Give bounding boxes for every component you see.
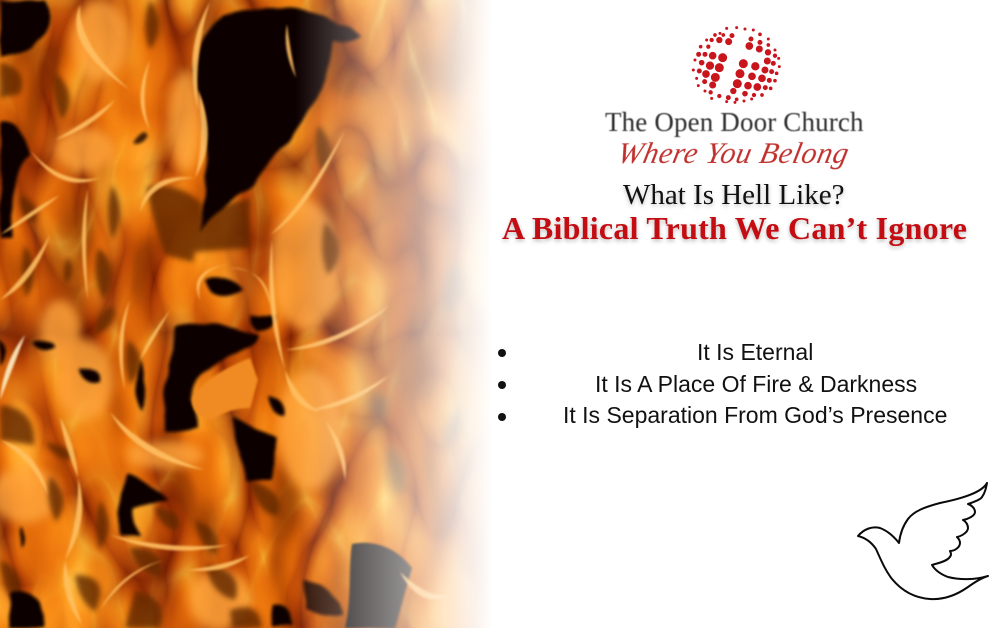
white fade overlay: [295, 0, 492, 628]
list item 1: It Is Eternal: [697, 338, 813, 364]
list item 2: It Is A Place Of Fire & Darkness: [595, 370, 917, 396]
list item 3: It Is Separation From God’s Presence: [563, 402, 947, 428]
logo: church name: The Open Door Church: [605, 107, 864, 137]
grey smoke at the bottom of the fade: [345, 543, 412, 628]
bullet dot 1: [498, 348, 506, 356]
bullet dot 3: [498, 412, 506, 420]
bullet dot 2: [498, 380, 506, 388]
panel: fire photo fading to white: [0, 0, 486, 628]
brown shadow folds inside the flames: [0, 0, 339, 628]
black gaps between the flames: [0, 0, 362, 628]
orange tongue crossing the central gap: [192, 358, 258, 419]
bullet list: [498, 338, 947, 428]
heading: question: What Is Hell Like?: [623, 179, 844, 211]
bright flame filaments: [0, 2, 450, 625]
bright flame masses: [0, 0, 342, 628]
grey smoke holes: [360, 80, 465, 498]
icon: dove outline: [857, 482, 989, 600]
heading: subtitle in red: A Biblical Truth We Can’t Ignore: [502, 210, 967, 246]
logo: church globe: [692, 26, 781, 104]
flame texture base: [0, 0, 510, 628]
logo: tagline: Where You Belong: [615, 137, 852, 170]
